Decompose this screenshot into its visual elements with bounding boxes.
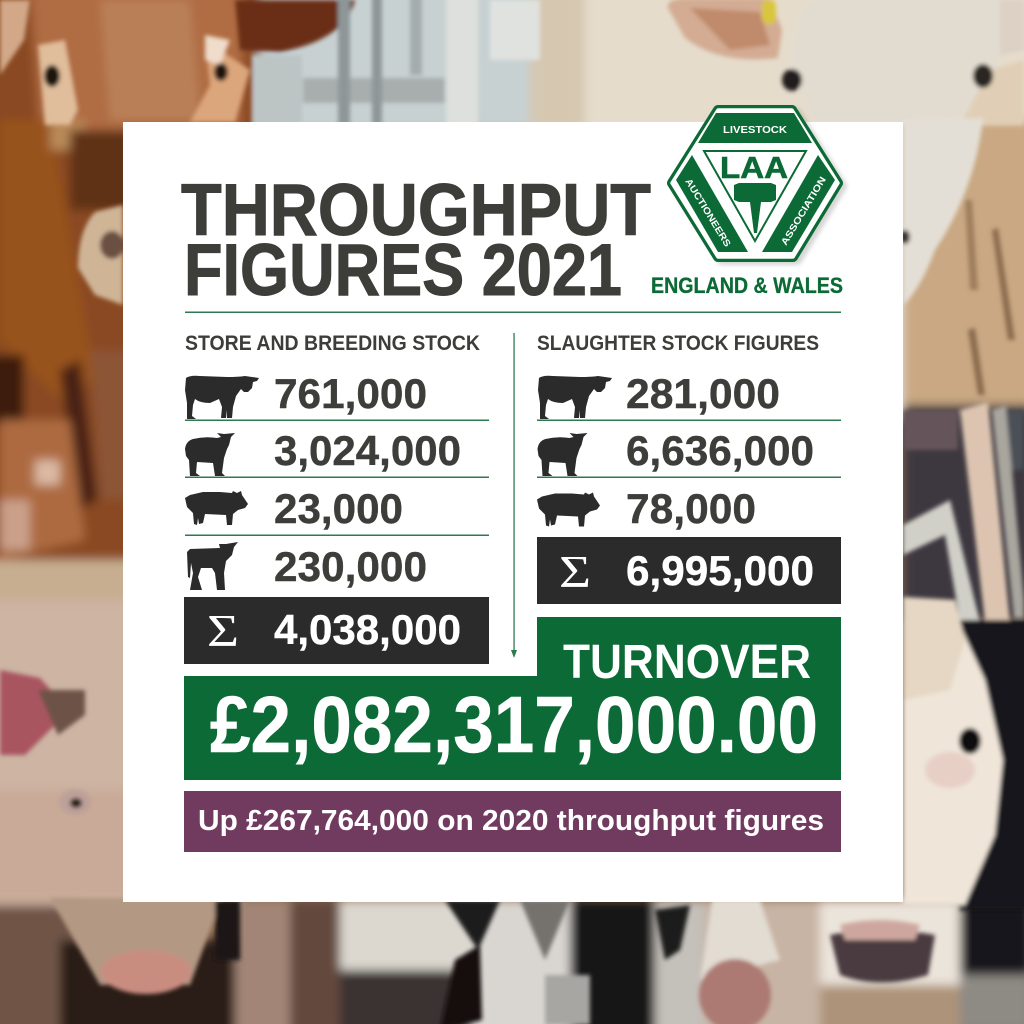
row: cattle — [537, 370, 841, 421]
heading: slaughter stock figures: SLAUGHTER STOCK FIGURES — [537, 332, 819, 355]
row: sheep — [185, 427, 489, 478]
row: sheep: 3,024,000 — [274, 427, 461, 474]
England & Wales: ENGLAND & WALES — [651, 273, 843, 298]
panel: store and breeding stock — [184, 332, 489, 664]
logo band: livestock: LIVESTOCK — [723, 124, 787, 136]
title rule — [185, 312, 841, 313]
logo band: livestock — [698, 113, 812, 143]
row: calves — [187, 542, 427, 590]
logo hexagon — [672, 110, 842, 260]
row: sheep: 6,636,000 — [626, 427, 814, 474]
logo triangle with LAA and gavel — [704, 150, 806, 241]
turnover value: £2,082,317,000.00 — [210, 680, 818, 769]
callout: change on 2020 — [184, 791, 841, 852]
total box: store: Σ — [207, 605, 239, 656]
row: cattle: 761,000 — [274, 370, 427, 417]
sheep head — [668, 0, 782, 59]
logo band: association: ASSOCIATION — [779, 175, 829, 248]
bottom — [50, 898, 222, 985]
row: cattle — [185, 370, 489, 421]
heading: store and breeding stock: STORE AND BREEDING STOCK — [185, 332, 480, 355]
logo triangle with LAA and gavel: LAA — [720, 150, 788, 185]
row: cattle: 281,000 — [626, 370, 780, 417]
cow right — [960, 620, 1024, 910]
logo: Livestock Auctioneers Association — [672, 110, 842, 260]
logo band: association — [762, 155, 835, 252]
arrow divider — [511, 333, 517, 658]
pig ear — [0, 670, 60, 755]
logo band: auctioneers — [676, 155, 748, 252]
turnover panel — [184, 617, 841, 780]
logo band: auctioneers: AUCTIONEERS — [682, 177, 733, 249]
total box: slaughter: 6,995,000 — [626, 547, 814, 594]
row: pigs — [185, 485, 489, 536]
title: FIGURES 2021 — [184, 230, 622, 311]
fence — [252, 55, 302, 125]
total box: store — [184, 597, 489, 664]
row: pigs: 23,000 — [274, 485, 403, 532]
row: sheep — [537, 427, 841, 478]
title: THROUGHPUT — [181, 170, 651, 251]
turnover label: TURNOVER — [563, 636, 811, 689]
cream ear / muzzle — [78, 205, 123, 305]
total box: store: 4,038,000 — [274, 606, 461, 653]
row: calves: 230,000 — [274, 543, 427, 590]
total box: slaughter — [537, 537, 841, 604]
callout: change on 2020: Up £267,764,000 on 2020 throughput figures — [198, 805, 824, 837]
title — [181, 170, 651, 311]
white content panel — [123, 122, 903, 902]
cow, top — [0, 0, 30, 75]
panel: slaughter stock figures — [537, 332, 841, 604]
barn — [903, 410, 958, 450]
row: pigs — [537, 485, 756, 532]
row: pigs: 78,000 — [626, 485, 756, 532]
total box: slaughter: Σ — [559, 546, 591, 597]
